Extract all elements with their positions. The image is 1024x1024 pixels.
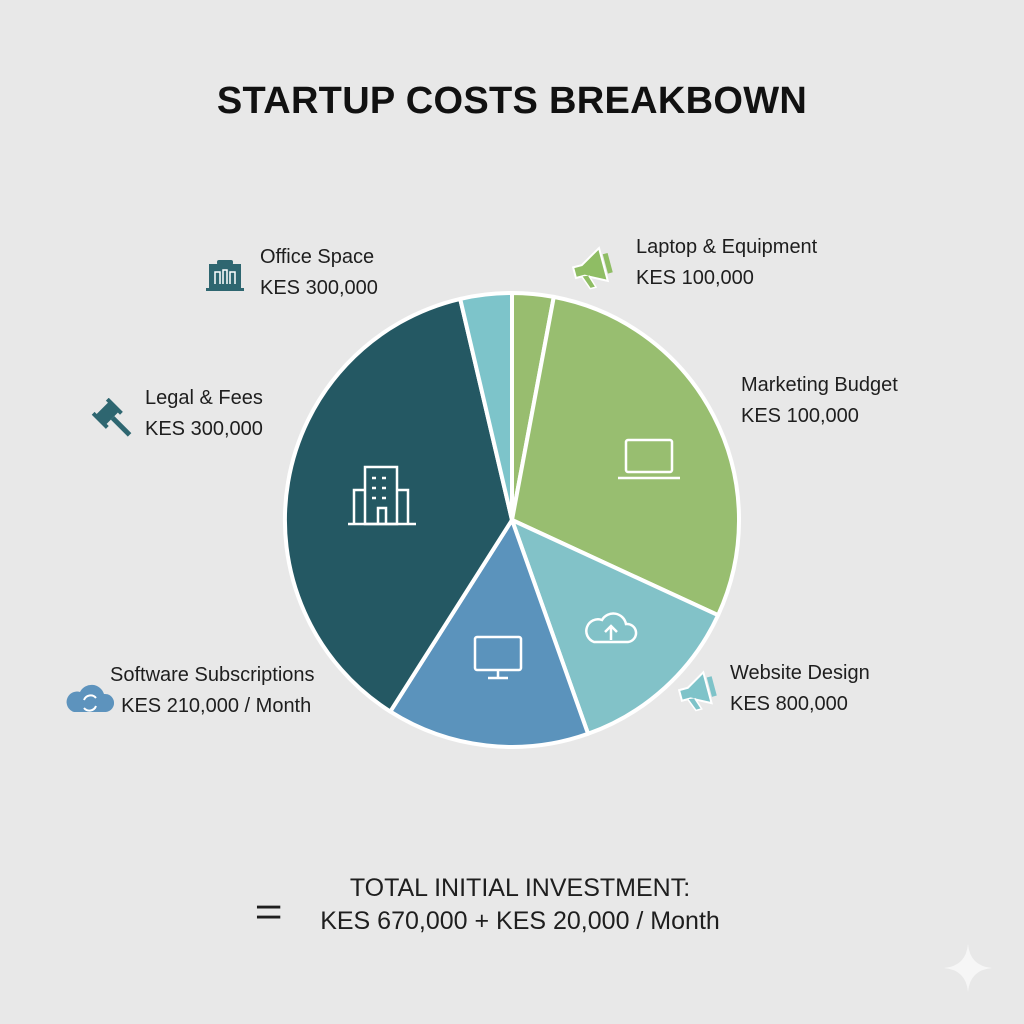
label: software subscriptions: KES 210,000 / Month <box>121 695 311 717</box>
slice: marketing green <box>512 297 739 615</box>
label: office space: KES 300,000 <box>260 277 378 299</box>
icon: laptop in slice <box>618 440 680 478</box>
icon: gavel <box>92 398 132 437</box>
slice: small green <box>512 293 554 520</box>
label: website design <box>730 662 870 715</box>
label: laptop & equipment: KES 100,000 <box>636 267 754 289</box>
total <box>255 874 720 935</box>
label: office space <box>260 246 378 299</box>
slice: cloud light teal <box>512 520 718 734</box>
label: legal & fees: Legal & Fees <box>145 387 263 409</box>
label: software subscriptions <box>110 664 315 717</box>
label: legal & fees <box>145 387 263 440</box>
icon: building in slice <box>348 467 416 524</box>
slice: small light teal <box>460 293 512 520</box>
icon: megaphone teal <box>678 670 717 712</box>
slice: dark teal building <box>285 299 512 712</box>
title: STARTUP COSTS BREAKBOWN <box>217 80 807 122</box>
label: marketing budget <box>741 374 898 427</box>
icon: sync cloud <box>66 684 114 712</box>
label: website design: KES 800,000 <box>730 693 848 715</box>
total text: KES 670,000 + KES 20,000 / Month <box>320 907 720 935</box>
icon: office building <box>206 260 244 291</box>
label: laptop & equipment: Laptop & Equipment <box>636 236 817 258</box>
icon: cloud upload in slice <box>586 614 636 642</box>
total text <box>320 874 720 935</box>
label: laptop & equipment <box>636 236 818 289</box>
label: office space: Office Space <box>260 246 374 268</box>
label: marketing budget: KES 100,000 <box>741 405 859 427</box>
label: software subscriptions: Software Subscriptions <box>110 664 315 686</box>
label: legal & fees: KES 300,000 <box>145 418 263 440</box>
icon: sparkle <box>946 946 990 990</box>
icon: megaphone green <box>572 246 613 290</box>
equals sign: = <box>255 890 283 934</box>
label: website design: Website Design <box>730 662 870 684</box>
total text: TOTAL INITIAL INVESTMENT: <box>350 874 690 902</box>
icon: monitor in slice <box>475 637 521 678</box>
slice: blue monitor <box>390 520 588 747</box>
label: marketing budget: Marketing Budget <box>741 374 898 396</box>
